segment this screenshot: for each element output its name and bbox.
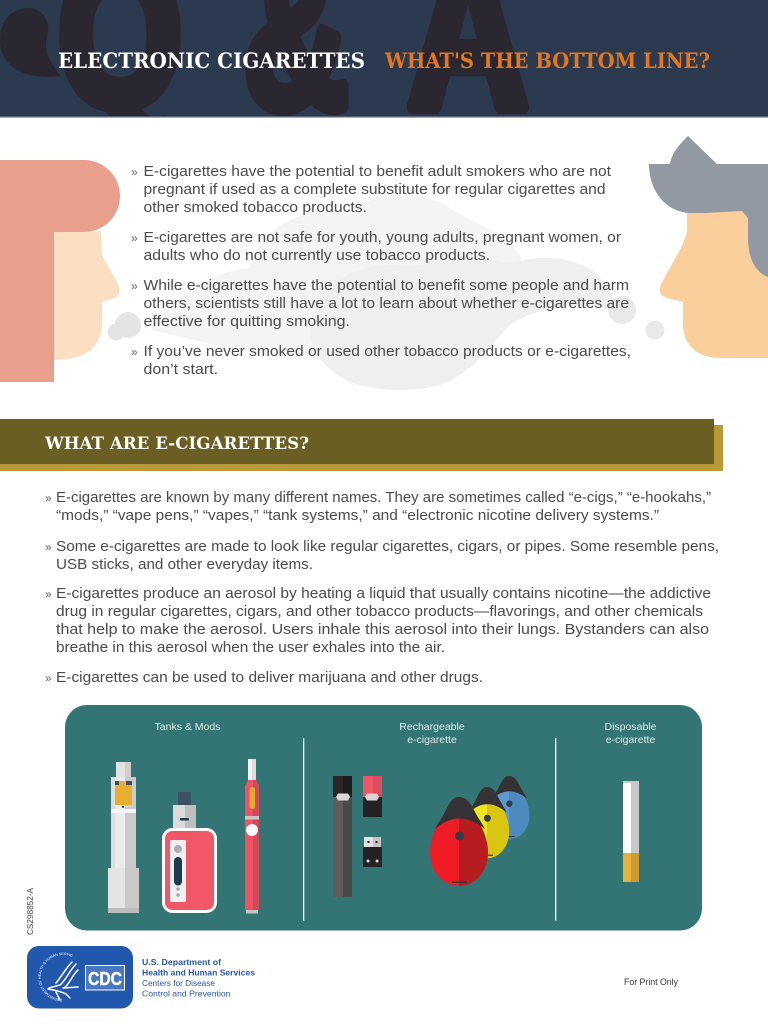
agency name: [142, 957, 255, 998]
agency name: Centers for Disease: [142, 978, 215, 988]
right head figure: [649, 136, 768, 358]
CDC box: CDC: [88, 969, 122, 989]
label: rechargeable: Rechargeable: [399, 721, 465, 733]
label: disposable: e-cigarette: [606, 734, 655, 746]
section band: [0, 419, 723, 471]
definition bullet list: Some e-cigarettes are made to look like regular cigarettes, cigars, or pipes. Some resemble pens,: [56, 539, 719, 555]
icon: tank vape: [108, 762, 139, 913]
subtitle: WHAT'S THE BOTTOM LINE?: [384, 49, 710, 74]
panel: device types: [65, 705, 702, 930]
intro bullet list: other smoked tobacco products.: [144, 200, 367, 216]
icon: HHS eagle: [48, 962, 78, 1000]
logo: HHS and CDC: [27, 946, 133, 1008]
definition bullet list: breathe in this aerosol when the user exhales into the air.: [56, 640, 445, 656]
intro bullet list: pregnant if used as a complete substitute for regular cigarettes and: [144, 182, 606, 198]
intro bullet list: effective for quitting smoking.: [144, 314, 350, 330]
intro bullet list: If you’ve never smoked or used other tobacco products or e-cigarettes,: [144, 344, 631, 360]
definition bullet list: E-cigarettes are known by many different names. They are sometimes called “e-cigs,” “e-hookahs,”: [56, 490, 711, 506]
intro bullet list: others, scientists still have a lot to learn about whether e-cigarettes are: [144, 296, 629, 312]
intro bullet list: »: [131, 231, 138, 245]
title: ELECTRONIC CIGARETTES: [58, 49, 365, 74]
label: disposable: Disposable: [605, 721, 657, 733]
agency name: Health and Human Services: [142, 968, 255, 978]
intro bullet list: adults who do not currently use tobacco products.: [144, 248, 490, 264]
definition bullet list: »: [45, 491, 52, 505]
definition bullet list: drug in regular cigarettes, cigars, and other tobacco products—flavorings, and other chemicals: [56, 604, 703, 620]
icon: USB charger: [363, 837, 382, 867]
icon: pod cartridge: [363, 776, 382, 817]
label: tanks and mods: Tanks & Mods: [155, 721, 220, 733]
smoke cloud: [108, 196, 664, 390]
definition bullet list: »: [45, 587, 52, 601]
icon: pod device: [333, 776, 352, 897]
print code: CS298852-A: [26, 887, 35, 935]
icon: yellow pod: [465, 787, 509, 858]
icon: vape pen: [245, 759, 259, 914]
label: rechargeable: e-cigarette: [407, 734, 457, 746]
header banner: [0, 0, 768, 118]
intro bullet list: »: [131, 165, 138, 179]
icon: blue pod: [489, 776, 529, 839]
definition bullet list: »: [45, 671, 52, 685]
intro bullet list: »: [131, 345, 138, 359]
icon: box mod: [164, 792, 216, 912]
definition bullet list: E-cigarettes produce an aerosol by heating a liquid that usually contains nicotine—the addictive: [56, 586, 711, 602]
definition bullet list: “mods,” “vape pens,” “vapes,” “tank systems,” and “electronic nicotine delivery systems.”: [56, 508, 659, 524]
intro bullet list: While e-cigarettes have the potential to benefit some people and harm: [144, 278, 629, 294]
intro bullet list: »: [131, 279, 138, 293]
definition bullet list: that help to make the aerosol. Users inhale this aerosol into their lungs. Bystanders can also: [56, 622, 709, 638]
definition bullet list: [45, 490, 719, 686]
agency name: Control and Prevention: [142, 988, 231, 998]
definition bullet list: USB sticks, and other everyday items.: [56, 557, 313, 573]
intro bullet list: E-cigarettes have the potential to benefit adult smokers who are not: [144, 164, 611, 180]
logo: HHS and CDC: DEPARTMENT OF HEALTH & HUMAN SERVICES USA: [38, 952, 73, 1002]
icon: disposable e-cigarette: [623, 781, 639, 882]
section heading: WHAT ARE E-CIGARETTES?: [44, 434, 309, 453]
intro bullet list: don’t start.: [144, 362, 218, 378]
intro bullet list: E-cigarettes are not safe for youth, young adults, pregnant women, or: [144, 230, 621, 246]
agency name: U.S. Department of: [142, 957, 221, 967]
print note: For Print Only: [624, 977, 678, 988]
left head figure: [0, 160, 120, 382]
intro bullet list: [131, 164, 631, 378]
definition bullet list: »: [45, 540, 52, 554]
icon: red pod: [430, 797, 488, 886]
definition bullet list: E-cigarettes can be used to deliver marijuana and other drugs.: [56, 670, 483, 686]
